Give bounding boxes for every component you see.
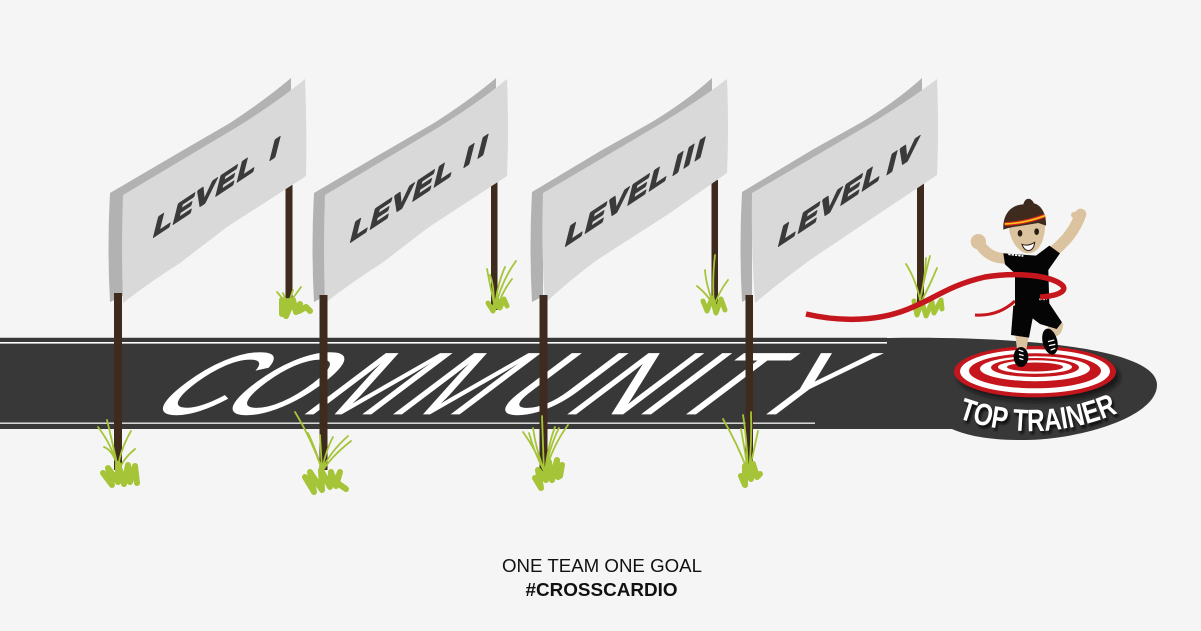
road: community track (0, 337, 1157, 440)
footer text: slogan and hashtag: #CROSSCARDIO (526, 580, 678, 600)
footer text: slogan and hashtag: ONE TEAM ONE GOAL (502, 556, 702, 576)
grass: level 3 front post (523, 416, 568, 488)
shirt logo (1008, 254, 1047, 299)
shoe laces (1019, 340, 1055, 360)
ribbon tail behind runner (975, 301, 1015, 315)
sign: level 4 (740, 78, 938, 303)
runner arms (975, 214, 1081, 258)
runner shorts (1011, 303, 1062, 338)
sign: level 2: LEVELII (347, 126, 493, 249)
road lettering: community: COMMUNITY (115, 335, 909, 433)
grass: level 1 front post (98, 420, 137, 485)
headband (1005, 216, 1045, 224)
grass: level 1 back post (277, 287, 310, 316)
sign post: level 3 front post (540, 295, 548, 473)
sign: level 1 (108, 78, 306, 303)
runner character (975, 199, 1081, 367)
sign: level 2 (312, 78, 508, 303)
sign: level 1: LEVELI (150, 129, 285, 244)
grass: level 4 back post (906, 256, 942, 316)
runner shoes (1014, 327, 1060, 367)
target: red and white bullseye (954, 346, 1120, 402)
sign: level 3 (530, 78, 728, 303)
sign post: level 3 back post (712, 180, 718, 305)
finish ribbon (806, 275, 1064, 319)
footer text: slogan and hashtag (502, 556, 702, 600)
runner head (1008, 220, 1045, 253)
grass: level 2 front post (295, 412, 351, 492)
label: top trainer: TOP TRAINER (963, 395, 1118, 432)
runner face (1018, 228, 1039, 251)
sign: level 4: LEVELIV (775, 129, 923, 253)
sign post: level 4 front post (746, 295, 753, 473)
sign post: level 2 front post (320, 295, 328, 470)
label: top trainer: TOP TRAINER (965, 398, 1120, 436)
sign post: level 1 front post (114, 293, 122, 470)
grass: level 2 back post (487, 261, 516, 311)
grass: level 4 front post (723, 412, 760, 485)
sign post: level 4 back post (917, 180, 924, 302)
runner legs (1015, 323, 1063, 352)
runner shirt (1003, 246, 1060, 307)
sign post: level 1 back post (286, 180, 292, 305)
sign: level 3: LEVELIII (562, 129, 710, 253)
sign post: level 2 back post (491, 180, 498, 310)
grass: level 3 back post (697, 255, 728, 313)
runner hair (1003, 199, 1046, 230)
